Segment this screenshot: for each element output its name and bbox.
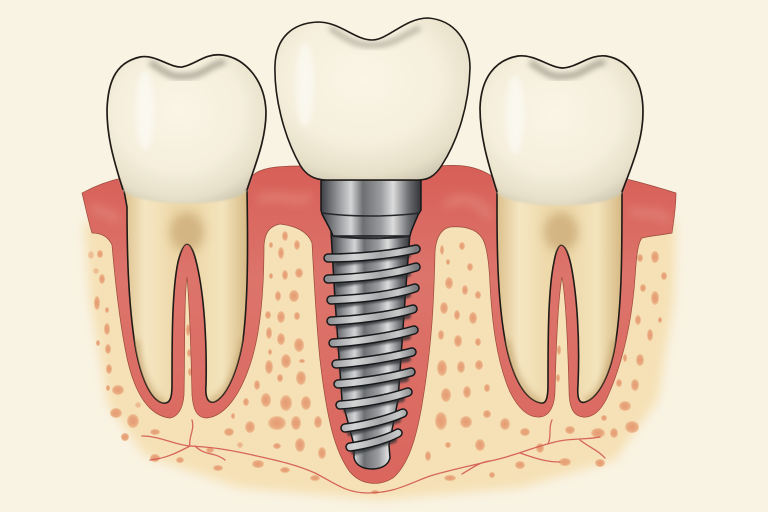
right tooth crown — [480, 56, 643, 205]
implant abutment — [321, 180, 421, 236]
right tooth root — [497, 190, 622, 403]
alveolar bone — [84, 222, 676, 500]
right natural tooth — [480, 56, 643, 403]
nerve and blood vessels — [142, 420, 605, 493]
bone pores — [88, 231, 667, 494]
implant crown — [275, 18, 470, 180]
titanium implant — [321, 180, 421, 469]
left natural tooth — [107, 55, 266, 403]
implant body — [331, 232, 410, 469]
left tooth root — [123, 185, 248, 403]
implant threads — [328, 249, 416, 452]
illustration: dental implant cross-section — [80, 17, 680, 504]
left tooth crown — [107, 55, 266, 204]
gum tissue — [82, 165, 676, 483]
